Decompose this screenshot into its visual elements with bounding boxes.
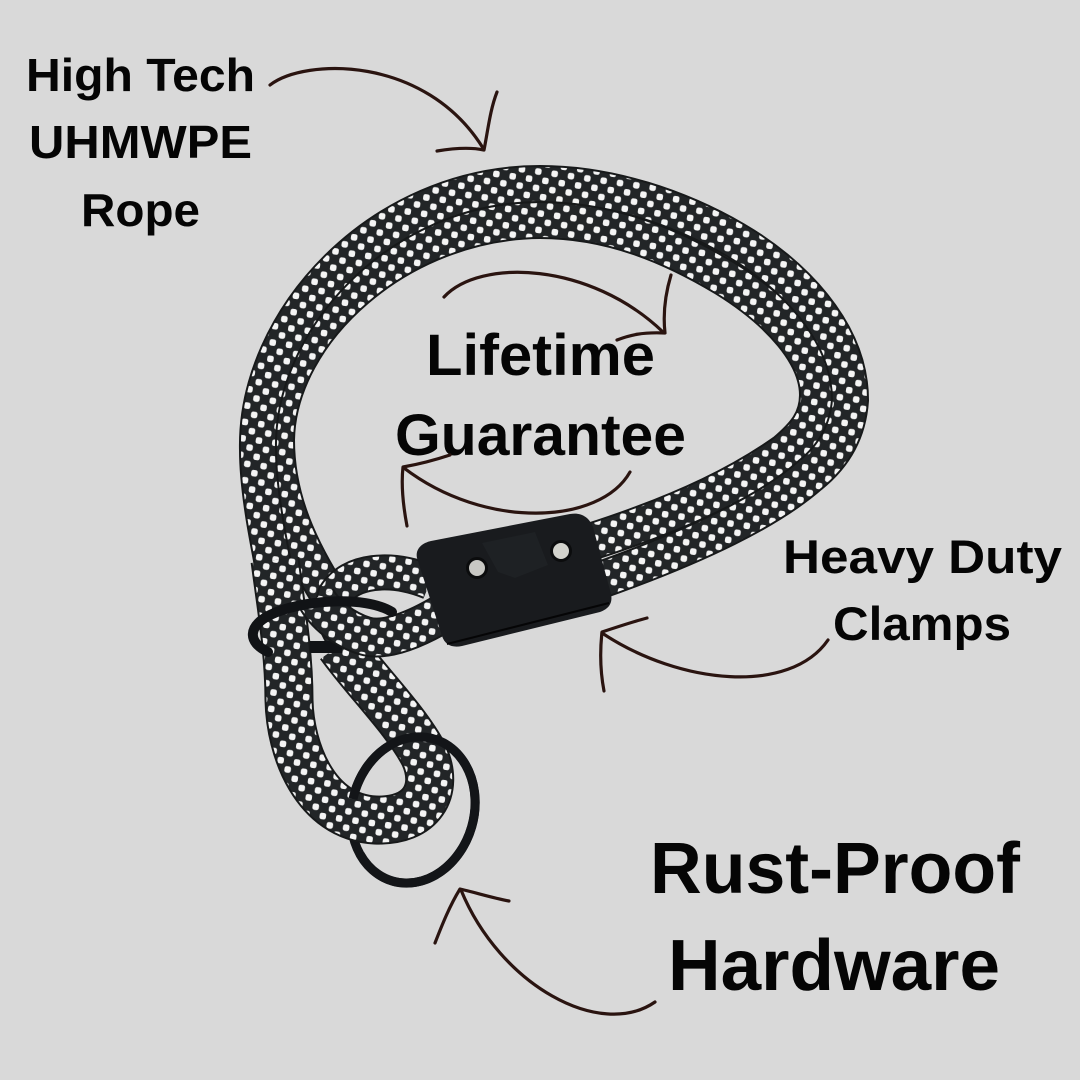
icon: lower ring front	[353, 737, 475, 883]
label: Lifetime Guarantee: Lifetime	[426, 323, 655, 388]
upper ring back stub	[310, 641, 342, 653]
label: Rust-Proof Hardware: Hardware	[668, 926, 1000, 1006]
rope strand: outer	[258, 184, 850, 600]
label: High Tech UHMWPE Rope: High Tech	[26, 49, 255, 101]
icon: upper ring front	[253, 601, 392, 652]
rope product photo	[258, 184, 850, 820]
arrow: to clamp	[601, 618, 828, 691]
heavy duty clamp	[417, 514, 611, 647]
arrow: to ring	[435, 889, 655, 1014]
label: High Tech UHMWPE Rope: UHMWPE	[29, 116, 252, 168]
arrow: lifetime upper	[444, 272, 671, 340]
rope strand: inner	[276, 220, 818, 600]
rope strand: crossing	[316, 598, 445, 638]
screw right	[552, 542, 570, 560]
rope strand: lower loop	[275, 560, 430, 820]
label: Rust-Proof Hardware: Rust-Proof	[650, 829, 1021, 909]
label: High Tech UHMWPE Rope	[26, 49, 255, 236]
screw left	[468, 558, 486, 578]
rope strand: upper arc to clamp	[333, 572, 430, 640]
label: Heavy Duty Clamps	[783, 530, 1062, 650]
label: Rust-Proof Hardware	[650, 829, 1021, 1006]
label: Lifetime Guarantee	[395, 323, 686, 468]
clamp body	[417, 514, 611, 647]
arrow: to rope	[270, 69, 497, 151]
label: High Tech UHMWPE Rope: Rope	[81, 184, 200, 236]
label: Heavy Duty Clamps: Heavy Duty	[783, 530, 1062, 583]
label: Lifetime Guarantee: Guarantee	[395, 403, 686, 468]
clamp recess	[482, 532, 548, 578]
label: Heavy Duty Clamps: Clamps	[833, 597, 1011, 650]
arrow: lifetime lower	[402, 455, 630, 526]
icon: lower ring back	[334, 722, 492, 898]
